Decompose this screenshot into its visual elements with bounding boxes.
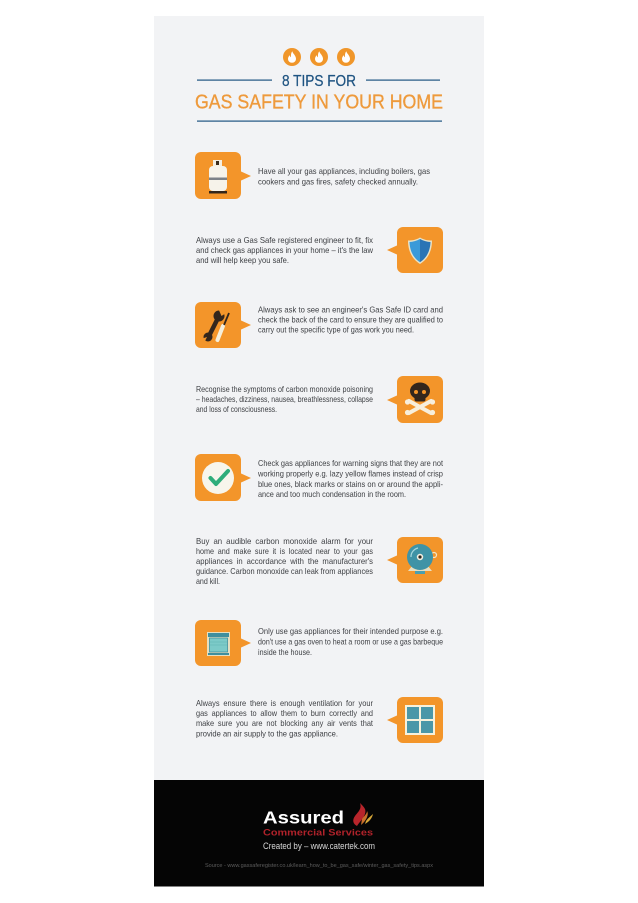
icon: window [387,697,443,743]
text [196,698,374,738]
text [258,304,443,334]
text [196,384,373,414]
text: Always ask to see an engineer's Gas Safe ID card and [258,304,443,314]
icon: three flames [283,48,355,66]
text: home and make sure it is located near to your gas [196,546,373,556]
icon: oven [195,620,251,666]
text: Only use gas appliances for their intended purpose e.g. [258,626,443,636]
title line 2: GAS SAFETY IN YOUR HOME [195,92,443,114]
text: and check gas appliances in your home – it's the law [196,245,374,255]
tip 3 [195,302,443,348]
text: Check gas appliances for warning signs that they are not [258,458,444,468]
text: blue ones, black marks or stains on or around the appli- [258,479,443,489]
tip 4 [196,376,443,423]
icon: gas cylinder [195,152,251,199]
title line 1: 8 TIPS FOR [282,73,356,90]
text [257,458,444,499]
text: Always use a Gas Safe registered engineer to fit, fix [196,235,374,245]
text [196,235,374,265]
logo: Assured Commercial Services [263,803,373,838]
text: working properly e.g. lazy yellow flames instead of crisp [257,468,443,478]
text: don't use a gas oven to heat a room or use a gas barbeque [258,636,443,646]
text: and loss of consciousness. [196,404,277,414]
icon: alarm bell [387,537,443,583]
tip 2 [196,227,443,273]
text: provide an air supply to the gas appliance. [196,728,338,738]
tip 5 [195,454,444,501]
footer [154,780,484,886]
logo: Assured Commercial Services: Assured [263,808,344,828]
icon: shield [387,227,443,273]
tip 8 [196,697,443,743]
icon: skull and crossbones [387,376,443,423]
tip 1 [195,152,430,199]
text: check the back of the card to ensure they are qualified to [258,314,443,324]
text: guidance. Carbon monoxide can leak from appliances [196,566,373,576]
text: inside the house. [258,647,312,657]
background panel [154,16,484,780]
text: cookers and gas fires, safety checked annually. [258,176,418,186]
text: Always ensure there is enough ventilation for your [196,698,373,708]
text: – headaches, dizziness, nausea, breathlessness, collapse [196,394,373,404]
icon: check mark [195,454,251,501]
text: appliances in accordance with the manufacturer's [196,556,373,566]
header [195,48,443,122]
text: Have all your gas appliances, including boilers, gas [258,166,430,176]
text: Recognise the symptoms of carbon monoxide poisoning [196,384,373,394]
source: Source - www.gassaferegister.co.uk/learn_how_to_be_gas_safe/winter_gas_safety_tips.aspx [205,863,434,869]
text: carry out the specific type of gas work you need. [258,324,414,334]
text [258,166,430,186]
text: and will help keep you safe. [196,255,289,265]
icon: spanner and screwdriver [195,302,251,348]
text: Buy an audible carbon monoxide alarm for your [196,536,373,546]
text: and kill. [196,576,220,586]
text: make sure you are not blocking any air vents that [196,718,374,728]
text [258,626,443,657]
tip 7 [195,620,443,666]
text: gas appliances to allow them to burn correctly and [196,708,373,718]
text: ance and too much condensation in the room. [258,489,406,499]
logo: Assured Commercial Services: Commercial Services [263,828,373,838]
tip 6 [196,536,443,586]
created by: Created by – www.catertek.com [263,841,375,851]
text [196,536,373,586]
